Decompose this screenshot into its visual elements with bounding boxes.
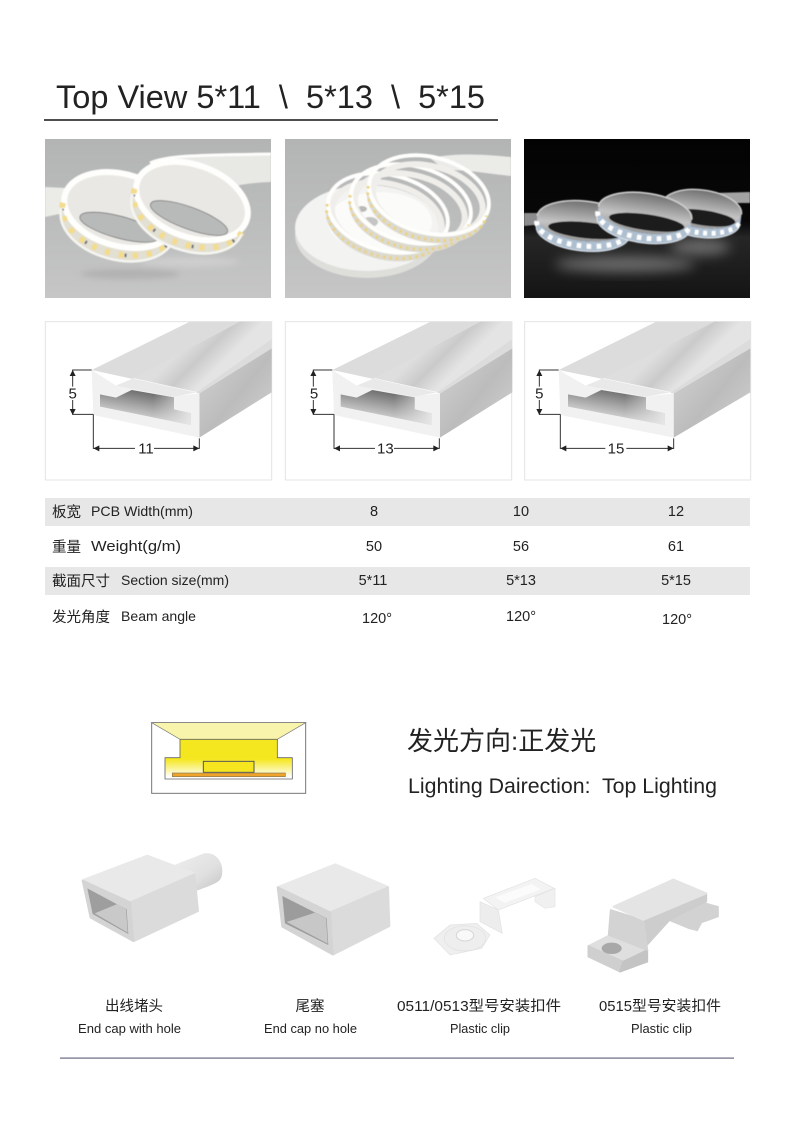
- row: weight: 50: [366, 539, 382, 555]
- caption: 0515 clip: 0515型号安装扣件: [599, 998, 721, 1015]
- row: section size: [45, 567, 750, 595]
- row: weight: [52, 538, 684, 556]
- profile body 5x13: [332, 322, 512, 438]
- caption: end cap with hole: [78, 998, 181, 1036]
- row: PCB width: 10: [513, 504, 529, 520]
- dimension 5: [310, 370, 334, 415]
- dimension 5: [535, 370, 560, 415]
- caption: end cap no hole: [264, 997, 357, 1036]
- row: PCB width: 8: [370, 504, 378, 520]
- dimension 15: 15: [608, 440, 624, 457]
- caption: 0515 clip: Plastic clip: [631, 1021, 692, 1036]
- row: beam angle: 发光角度: [52, 609, 110, 626]
- row: beam angle: 120°: [662, 612, 692, 628]
- dimension 5: 5: [310, 385, 318, 402]
- row: section size: 5*13: [506, 573, 536, 589]
- dimension 13: 13: [377, 440, 394, 457]
- caption: end cap with hole: End cap with hole: [78, 1021, 181, 1036]
- row: section size: Section size(mm): [121, 572, 229, 588]
- row: weight: 61: [668, 539, 684, 555]
- dimension 5: 5: [535, 385, 544, 402]
- profile body 5x11: [92, 322, 272, 438]
- row: beam angle: [52, 608, 692, 628]
- dimension 11: [93, 414, 199, 457]
- row: section size: 5*11: [359, 573, 387, 589]
- panel: profile 5x15: [525, 322, 751, 480]
- caption: 0511/0513 clip: [397, 998, 561, 1036]
- row: section size: 截面尺寸: [52, 573, 110, 590]
- row: PCB width: [45, 498, 750, 526]
- row: beam angle: Beam angle: [121, 608, 196, 624]
- photo: strip on reel: [285, 139, 511, 298]
- row: weight: Weight(g/m): [91, 538, 181, 555]
- profile body 5x15: [559, 322, 750, 438]
- row: PCB width: PCB Width(mm): [91, 503, 193, 519]
- caption: 0515 clip: [599, 998, 721, 1036]
- caption: end cap no hole: End cap no hole: [264, 1021, 357, 1036]
- lighting direction heading: 发光方向:正发光: [407, 726, 596, 756]
- lighting direction english: Lighting Dairection: Top Lighting: [408, 775, 717, 798]
- caption: 0511/0513 clip: 0511/0513型号安装扣件: [397, 998, 561, 1015]
- panel: profile 5x11: [45, 322, 272, 480]
- title: Top View 5*11 \ 5*13 \ 5*15: [56, 79, 485, 115]
- photo: lit strip on dark floor: [524, 139, 750, 298]
- caption: end cap no hole: 尾塞: [296, 997, 324, 1015]
- row: beam angle: 120°: [506, 609, 536, 625]
- icon: end cap with hole: [83, 853, 222, 941]
- row: PCB width: 板宽: [52, 503, 81, 521]
- photo: warm strip rings: [45, 139, 271, 298]
- icon: gray plastic clip: [588, 879, 718, 972]
- row: weight: 56: [513, 539, 529, 555]
- spec table: [45, 498, 750, 628]
- row: PCB width: 12: [668, 504, 684, 520]
- row: section size: 5*15: [661, 573, 691, 589]
- caption: end cap with hole: 出线堵头: [105, 998, 163, 1015]
- row: weight: 重量: [52, 539, 81, 556]
- dimension 15: [560, 414, 674, 457]
- dimension 5: [68, 370, 93, 415]
- lighting direction diagram: [152, 723, 306, 793]
- row: beam angle: 120°: [362, 611, 392, 627]
- caption: 0511/0513 clip: Plastic clip: [450, 1021, 510, 1036]
- icon: end cap no hole: [278, 864, 389, 954]
- dimension 5: 5: [68, 385, 77, 402]
- panel: profile 5x13: [285, 322, 512, 480]
- icon: clear plastic clip: [434, 878, 555, 955]
- dimension 11: 11: [138, 440, 154, 457]
- dimension 13: [334, 414, 439, 457]
